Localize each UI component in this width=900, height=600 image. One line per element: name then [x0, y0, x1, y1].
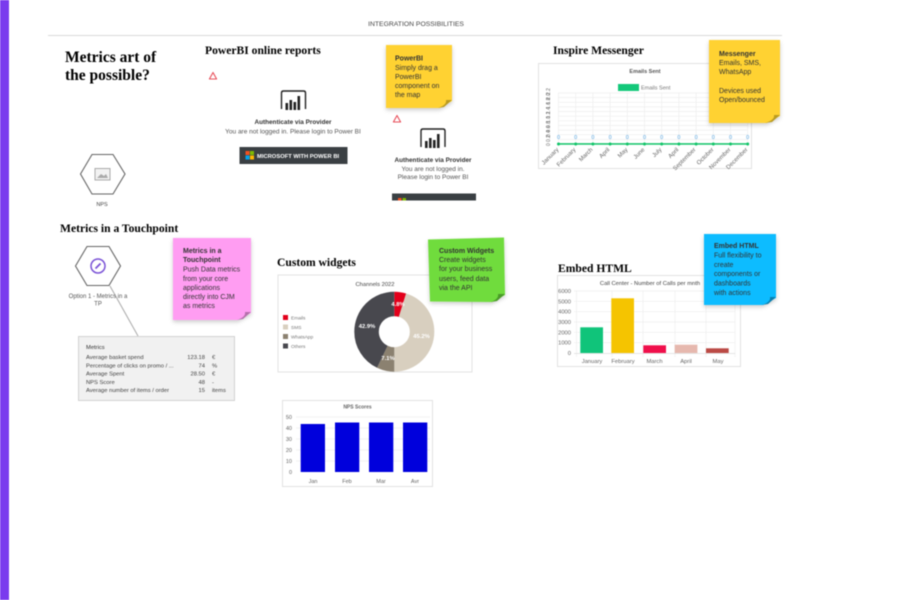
- y axis labels: [286, 415, 292, 476]
- month labels: July: [652, 147, 663, 159]
- y axis labels: 0: [546, 143, 552, 146]
- hexagon outline: [80, 154, 125, 194]
- metrics table: Percentage of clicks on promo / ...: [86, 364, 174, 370]
- data labels: 0: [574, 135, 577, 141]
- y axis labels: 0: [289, 470, 292, 476]
- month labels: May: [617, 147, 629, 159]
- second auth prompt text: You are not logged in.: [401, 166, 465, 173]
- sticky note: Embed HTML: dashboards: [714, 280, 751, 288]
- sticky note: Messenger: Devices used: [719, 88, 761, 95]
- month labels: September: [672, 147, 697, 172]
- metrics table: €: [212, 372, 216, 378]
- sticky note: Custom Widgets: [428, 238, 505, 302]
- y axis labels: 6000: [558, 289, 571, 295]
- metrics table: 123.18: [187, 355, 205, 361]
- sticky note: Custom Widgets: via the API: [439, 285, 473, 292]
- chart title: Call Center - Number of Calls per mnth: [600, 281, 700, 287]
- node label: Option 1 - Metrics in a: [69, 294, 127, 300]
- sticky note: Messenger: Messenger: [719, 51, 756, 58]
- NPS hexagon node: [80, 154, 125, 208]
- panel: Inspire Messenger: [538, 44, 752, 172]
- slice labels: 42.9%: [359, 324, 375, 330]
- x axis labels: Jan: [309, 479, 317, 485]
- month labels: April: [668, 147, 680, 160]
- month labels: March: [578, 147, 594, 163]
- legend: Emails: [291, 316, 306, 322]
- y axis labels: 0.6: [546, 125, 552, 132]
- x axis labels: Feb: [342, 479, 352, 485]
- data labels: 0: [626, 135, 629, 141]
- sticky note: Custom Widgets: users, feed data: [439, 276, 489, 283]
- month labels: November: [709, 147, 732, 171]
- connector line: [110, 286, 138, 336]
- sticky note: PowerBI: PowerBI: [395, 74, 422, 81]
- legend: Emails Sent: [641, 86, 671, 92]
- month labels: October: [696, 147, 715, 167]
- data labels: 0: [557, 135, 560, 141]
- second auth prompt text: Authenticate via Provider: [394, 157, 472, 164]
- slice labels: 4.8%: [391, 302, 405, 308]
- metrics table: items: [212, 388, 226, 394]
- data labels: 0: [677, 135, 680, 141]
- heading: Custom widgets: [277, 256, 356, 269]
- metrics table: Average basket spend: [86, 355, 144, 361]
- x axis labels: February: [611, 359, 635, 365]
- sticky note: PowerBI: Simply drag a: [395, 65, 438, 72]
- metrics table: 48: [199, 380, 205, 386]
- y axis labels: [558, 289, 571, 357]
- data labels: 0: [609, 135, 612, 141]
- y axis labels: 2.0: [546, 93, 552, 100]
- chart title: NPS Scores: [343, 404, 372, 410]
- y axis labels: 0.4: [546, 130, 552, 137]
- Microsoft login button: [240, 147, 348, 164]
- x axis labels: [309, 479, 419, 485]
- month labels: December: [726, 147, 749, 171]
- y axis labels: 20: [286, 448, 292, 454]
- heading: PowerBI online reports: [205, 44, 321, 57]
- x axis labels: [582, 359, 724, 365]
- sticky note: Metrics in a Touchpoint: Touchpoint: [183, 257, 221, 264]
- x axis labels: Mar: [376, 479, 386, 485]
- metrics table: 15: [199, 388, 205, 394]
- bars: [301, 422, 427, 472]
- y axis labels: 1.6: [546, 102, 552, 109]
- metrics table: -: [212, 380, 214, 386]
- x axis labels: April: [680, 359, 692, 365]
- sticky note: Metrics in a Touchpoint: as metrics: [183, 303, 215, 310]
- sticky note: Messenger: Emails, SMS,: [719, 60, 761, 67]
- cropped login button: [392, 194, 476, 200]
- legend: [618, 84, 671, 92]
- bar chart: calls per month: [558, 276, 740, 366]
- metrics table: €: [212, 355, 216, 361]
- heading: Inspire Messenger: [553, 44, 644, 57]
- page title: INTEGRATION POSSIBILITIES: [368, 21, 464, 28]
- heading: Embed HTML: [558, 262, 632, 275]
- sticky note: Custom Widgets: for your business: [439, 266, 493, 273]
- month labels: April: [599, 147, 611, 160]
- data labels: [557, 135, 749, 141]
- chart title: Emails Sent: [629, 69, 661, 75]
- y axis labels: 50: [286, 415, 292, 421]
- data labels: 0: [660, 135, 663, 141]
- panel: PowerBI online reports: [205, 44, 476, 200]
- y axis labels: 5000: [558, 299, 571, 305]
- icon: second PowerBI chart: [421, 129, 445, 148]
- panel: Metrics in a Touchpoint: [60, 222, 234, 400]
- auth prompt text: You are not logged in. Please login to Power BI: [225, 128, 361, 136]
- line chart: emails sent: [538, 64, 752, 172]
- metrics table: Average number of items / order: [86, 388, 169, 394]
- node label: TP: [94, 302, 102, 308]
- heading: metrics art of the possible: the possible?: [65, 67, 150, 84]
- sticky note: Messenger: [709, 40, 780, 123]
- sticky note: Metrics in a Touchpoint: applications: [183, 285, 220, 292]
- y axis labels: 10: [286, 459, 292, 465]
- icon: image placeholder: [95, 168, 110, 180]
- panel: Embed HTML: [558, 262, 740, 366]
- data line: [557, 142, 749, 146]
- chart title: Channels 2022: [356, 282, 394, 288]
- x axis labels: January: [582, 359, 602, 365]
- y axis labels: 4000: [558, 310, 571, 316]
- metrics table: 74: [199, 364, 206, 370]
- sticky note: Embed HTML: Embed HTML: [714, 243, 759, 250]
- sticky note: Embed HTML: [704, 234, 776, 305]
- second auth prompt text: Please login to Power BI: [398, 174, 469, 181]
- data labels: 0: [643, 135, 646, 141]
- data labels: 0: [712, 135, 715, 141]
- y axis labels: 40: [286, 426, 292, 432]
- metrics table: 28.50: [190, 372, 205, 378]
- sticky note: Custom Widgets: Create widgets: [439, 257, 486, 264]
- sticky note: Metrics in a Touchpoint: [173, 238, 251, 320]
- NPS label: NPS: [96, 202, 108, 208]
- y axis labels: 1.8: [546, 97, 552, 104]
- y axis labels: 1000: [558, 341, 571, 347]
- heading: metrics art of the possible: Metrics art of: [65, 49, 156, 66]
- y axis labels: 1.4: [546, 107, 552, 114]
- slice labels: 45.2%: [413, 334, 430, 340]
- month labels: [541, 147, 749, 172]
- y axis labels: 1.2: [546, 111, 552, 118]
- data labels: 0: [591, 135, 594, 141]
- month labels: June: [633, 147, 647, 161]
- y axis labels: 0: [568, 351, 571, 357]
- sticky note: Embed HTML: components or: [714, 271, 761, 278]
- slice labels: 7.1%: [381, 356, 395, 362]
- metrics table: [78, 336, 234, 400]
- y axis labels: 0.2: [546, 135, 552, 142]
- auth prompt text: Authenticate via Provider: [254, 119, 332, 126]
- sticky note: Embed HTML: create: [714, 262, 734, 269]
- month labels: February: [556, 147, 577, 168]
- sticky note: Custom Widgets: Custom Widgets: [439, 248, 494, 255]
- sticky note: Metrics in a Touchpoint: Metrics in a: [183, 248, 222, 255]
- x axis labels: March: [646, 359, 663, 365]
- sticky note: Metrics in a Touchpoint: Push Data metrics: [183, 266, 241, 274]
- Microsoft login button: MICROSOFT WITH POWER BI: [257, 154, 340, 160]
- purple sidebar: [0, 0, 9, 600]
- metrics table: Average Spent: [86, 372, 125, 378]
- bar chart: NPS scores: [282, 400, 432, 486]
- y axis labels: 1.0: [546, 116, 552, 123]
- legend: Others: [291, 344, 306, 350]
- grid lines: [558, 93, 748, 147]
- sticky note: Embed HTML: with actions: [713, 290, 751, 297]
- sticky note: PowerBI: the map: [395, 92, 420, 99]
- y axis labels: 0.8: [546, 121, 552, 128]
- data labels: 0: [746, 135, 749, 141]
- sticky note: Metrics in a Touchpoint: from your core: [183, 276, 228, 283]
- metrics table: Metrics: [86, 345, 105, 351]
- y axis labels: 3000: [558, 320, 571, 326]
- sticky note: PowerBI: [386, 45, 452, 108]
- metrics table: %: [212, 364, 217, 370]
- data labels: 0: [729, 135, 732, 141]
- hexagon node: [76, 246, 120, 286]
- metrics table: NPS Score: [86, 380, 115, 386]
- legend: SMS: [291, 325, 301, 331]
- legend: [283, 315, 313, 350]
- donut chart: channels 2022: [278, 275, 472, 372]
- sticky note: PowerBI: component on: [395, 83, 439, 90]
- x axis labels: Avr: [411, 479, 419, 485]
- y axis labels: 30: [286, 437, 292, 443]
- y axis labels: [546, 88, 552, 146]
- sticky note: Metrics in a Touchpoint: directly into CJM: [183, 294, 235, 301]
- panel: Custom widgets: [277, 256, 472, 486]
- slice labels: [359, 302, 430, 362]
- heading: Metrics in a Touchpoint: [60, 222, 178, 235]
- sticky note: PowerBI: PowerBI: [395, 56, 423, 62]
- month labels: January: [541, 147, 560, 167]
- donut slices: [367, 304, 422, 359]
- data labels: 0: [695, 135, 698, 141]
- y axis labels: 2.2: [546, 88, 552, 95]
- icon: warning: [209, 72, 217, 79]
- icon: PowerBI chart: [282, 91, 306, 110]
- sticky note: Embed HTML: Full flexibility to: [714, 252, 762, 260]
- sticky note: Messenger: WhatsApp: [719, 69, 751, 76]
- y axis labels: 2000: [558, 330, 571, 336]
- icon: second warning: [393, 116, 401, 122]
- sticky note: Messenger: Open/bounced: [719, 97, 765, 104]
- x axis labels: May: [713, 359, 724, 365]
- legend: WhatsApp: [291, 334, 313, 340]
- bars: [580, 298, 729, 353]
